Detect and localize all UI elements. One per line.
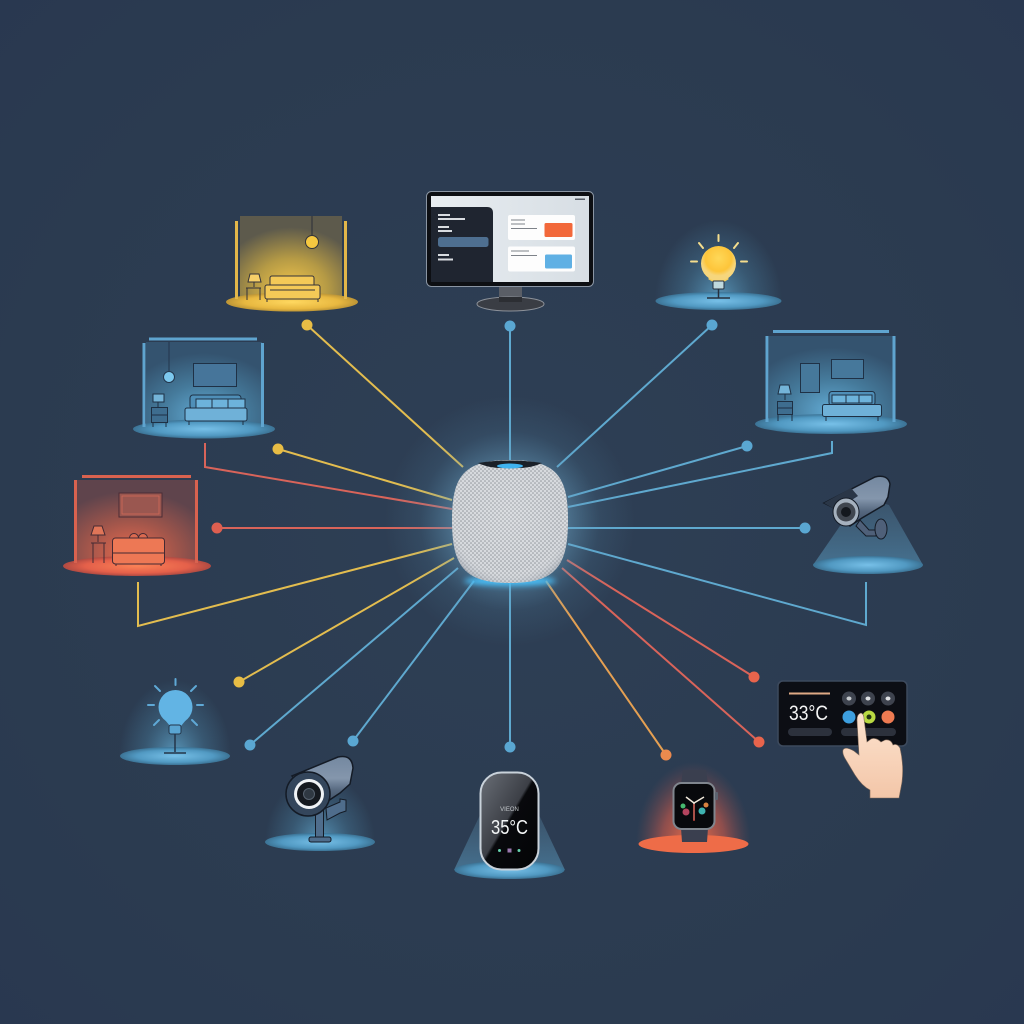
hand pointing: [843, 713, 903, 798]
pendant lamp: [306, 216, 318, 248]
connection lines: [138, 325, 866, 755]
panel accent bar: [789, 692, 830, 694]
side table and lamp: [91, 526, 106, 563]
sofa: [265, 276, 320, 302]
camera lens: [286, 772, 330, 816]
wall frame: [119, 493, 162, 517]
security camera right: [813, 476, 923, 574]
sofa: [112, 534, 164, 566]
wall frames: [800, 360, 864, 392]
line: blue elbow to camera: [568, 544, 866, 625]
watch face hands: [686, 797, 704, 820]
dashboard card blue: [508, 246, 575, 272]
camera body: [292, 756, 353, 805]
touch control panel: [778, 681, 907, 798]
blue room right: [755, 330, 907, 434]
sofa: [822, 392, 882, 421]
camera mount: [856, 519, 887, 539]
thermostat readout: VIEON: [500, 807, 519, 813]
line: yellow upper left: [278, 449, 452, 500]
line: yellow to blue bulb: [239, 558, 454, 682]
watch band: [681, 770, 708, 842]
line: blue to camera: [353, 581, 474, 741]
line: blue lower left: [250, 568, 458, 745]
panel pills: [788, 728, 896, 736]
pendant lamp: [164, 342, 174, 382]
line: blue to monitor: [509, 326, 511, 460]
yellow living room: [226, 216, 358, 312]
line: blue to camera horizontal: [568, 527, 805, 529]
line: orange to watch: [546, 581, 666, 755]
red living room: [63, 475, 211, 576]
side table and lamp: [246, 274, 261, 300]
bulb rays: [148, 679, 203, 725]
thermostat readout: 35°C: [491, 817, 528, 839]
line: blue elbow to right room: [568, 441, 832, 507]
dashboard sidebar: [431, 207, 493, 282]
line end dots: [212, 320, 810, 760]
thermostat device: [454, 772, 565, 879]
smartwatch: [636, 762, 751, 853]
central hub glow: [385, 396, 635, 646]
line: blue to thermostat: [509, 583, 511, 747]
wall frame: [194, 364, 236, 386]
computer monitor dashboard: [426, 192, 594, 311]
line: blue upper right: [568, 446, 747, 497]
security camera bottom left: [265, 756, 375, 851]
temperature text: 33°C: [789, 702, 828, 725]
line: red to touch panel upper: [567, 560, 754, 677]
bulb rays: [691, 235, 747, 262]
line: red to touch panel lower: [562, 568, 759, 742]
control buttons: [842, 692, 895, 724]
line: blue to yellow bulb: [557, 325, 712, 467]
blue light bulb: [119, 679, 231, 765]
smart speaker hub: [452, 460, 568, 586]
blue bedroom left: [133, 338, 275, 438]
watch case: [674, 783, 714, 829]
line: yellow to yellow room: [307, 325, 463, 467]
thermostat readout: [491, 807, 528, 852]
yellow light bulb: [655, 220, 782, 310]
nightstand and lamp: [152, 394, 168, 427]
line: red to red room: [217, 527, 452, 529]
dashboard card orange: [508, 215, 575, 240]
camera post and bracket: [309, 799, 346, 842]
nightstand and lamp: [778, 385, 792, 421]
camera body: [824, 476, 890, 526]
line: red elbow to blue room: [205, 443, 452, 509]
camera lens: [833, 498, 859, 526]
line: yellow elbow to red room: [138, 544, 452, 626]
sofa: [185, 395, 247, 425]
monitor stand: [477, 286, 544, 311]
